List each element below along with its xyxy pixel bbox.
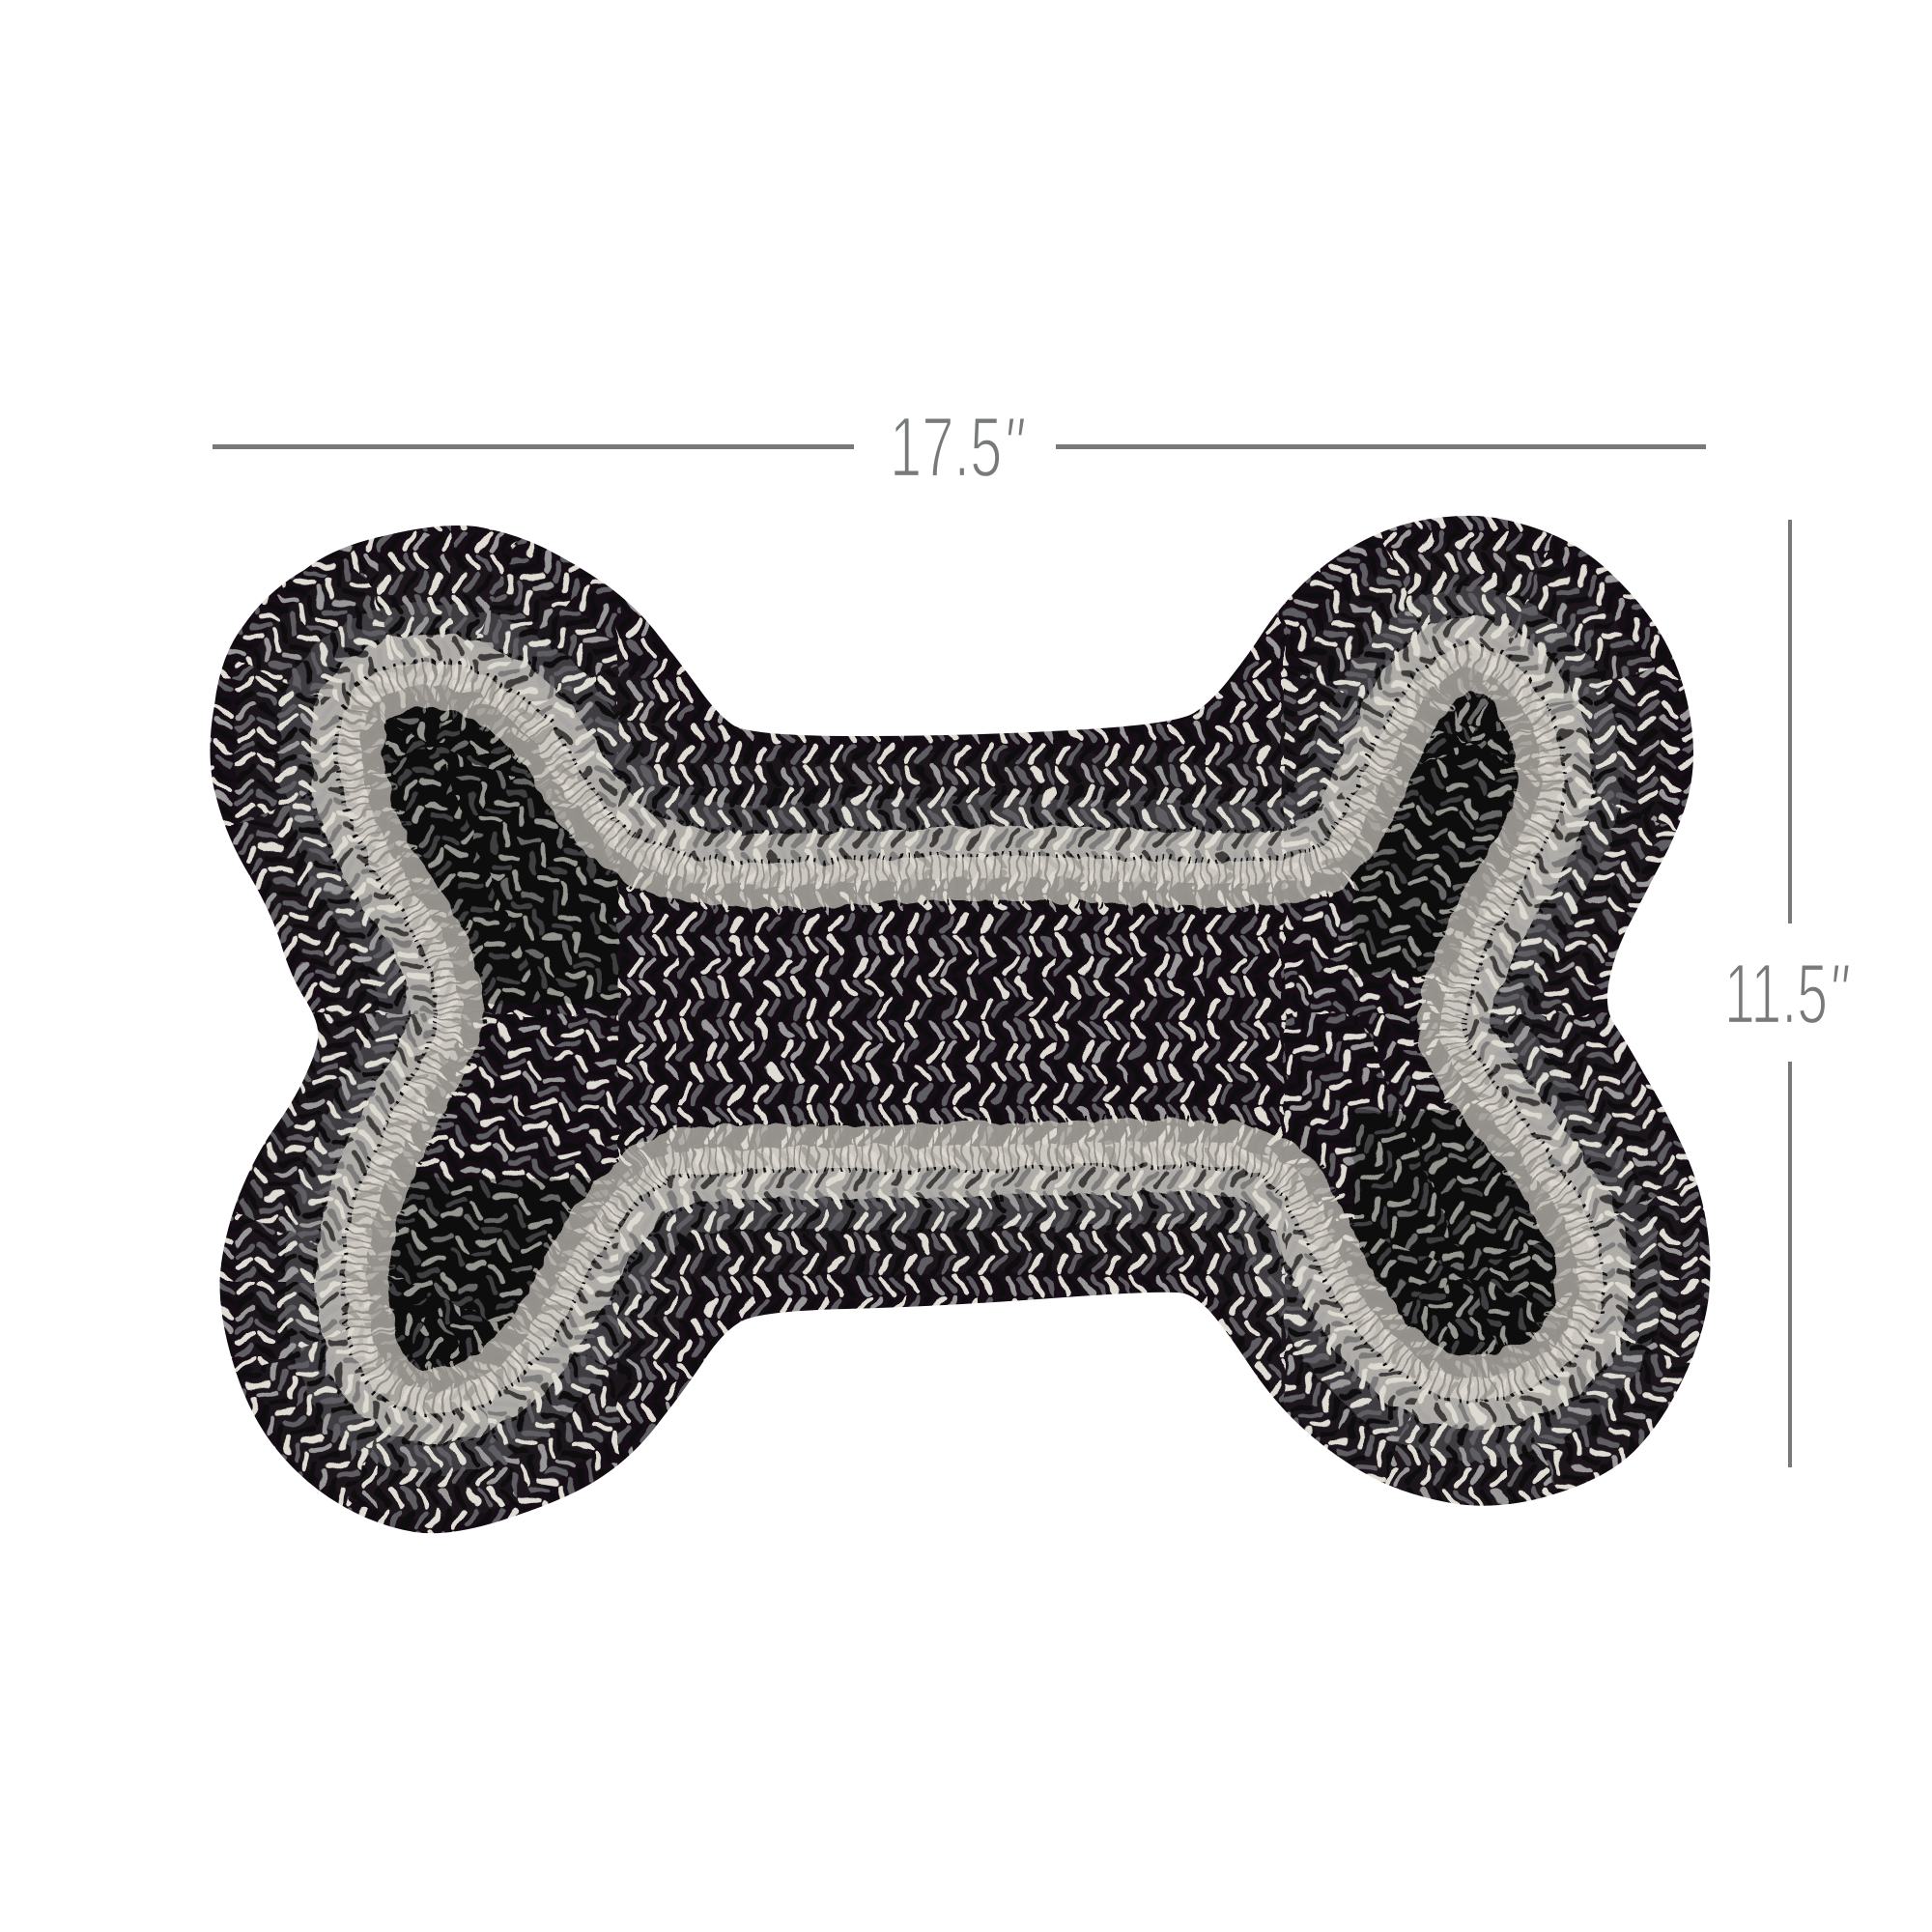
tonal rings xyxy=(361,668,1579,1391)
height dimension: 11.5 inches: 11.5" xyxy=(1724,947,1850,1041)
height dimension: 11.5 inches xyxy=(1724,520,1850,1467)
bone-shaped braided rug xyxy=(210,516,1710,1534)
herringbone texture sectors xyxy=(211,516,1710,1534)
centre and lobe interior xyxy=(361,668,1579,1391)
pale outer cream braid xyxy=(361,668,1579,1391)
width dimension: 17.5 inches: 17.5" xyxy=(890,399,1025,495)
width dimension: 17.5 inches xyxy=(213,399,1706,495)
darkened lobe interiors xyxy=(328,647,1594,1410)
cream braid ring with stitching xyxy=(361,668,1579,1391)
